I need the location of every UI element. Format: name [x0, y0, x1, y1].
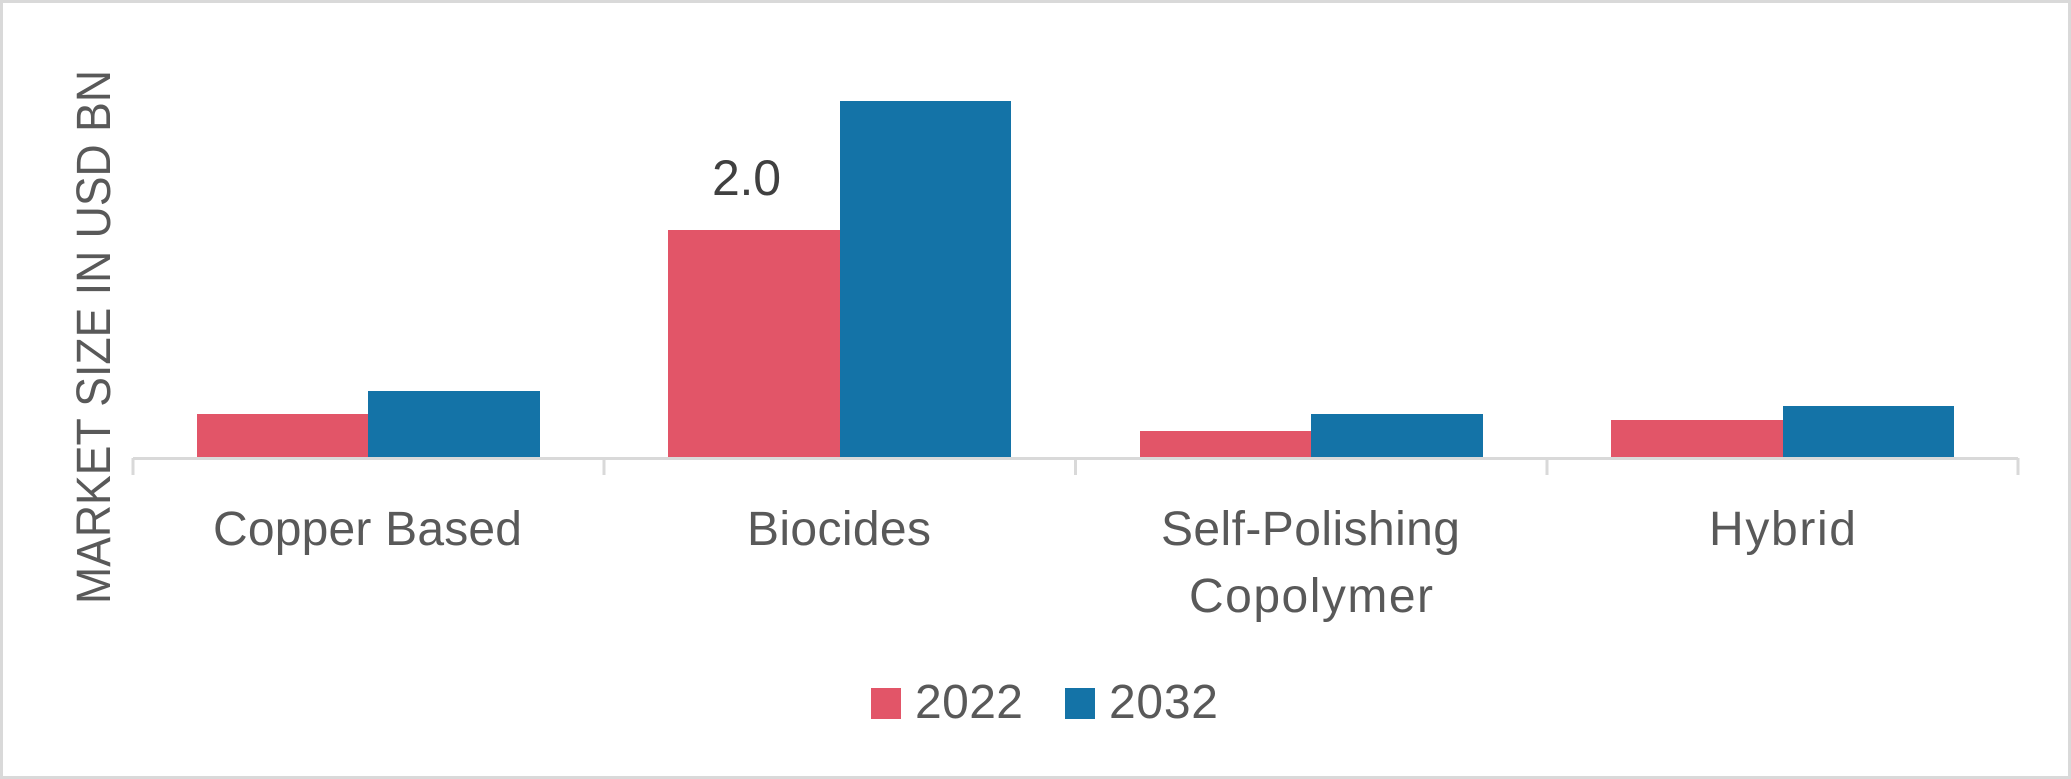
y axis title: MARKET SIZE IN USD BN: [68, 70, 121, 604]
x axis: [133, 458, 2018, 475]
category label: Biocides: Biocides: [747, 503, 931, 556]
bars: Hybrid: [1611, 406, 1954, 457]
legend: [871, 676, 1218, 729]
data label: Biocides 2022: 2.0: [712, 150, 781, 206]
category label: Self-Polishing Copolymer: Self-Polishing: [1161, 503, 1460, 556]
category label: Copper Based: Copper Based: [213, 503, 522, 556]
category label: Hybrid: Hybrid: [1709, 503, 1856, 556]
category label: Self-Polishing Copolymer: [1161, 503, 1460, 623]
legend item: 2022: 2022: [915, 676, 1023, 729]
category label: Self-Polishing Copolymer: Copolymer: [1189, 570, 1433, 623]
bars: Biocides: [668, 101, 1011, 457]
bars: Copper Based: [197, 391, 540, 457]
legend item: 2032: 2032: [1109, 676, 1218, 729]
bars: Self-Polishing Copolymer: [1140, 414, 1483, 457]
